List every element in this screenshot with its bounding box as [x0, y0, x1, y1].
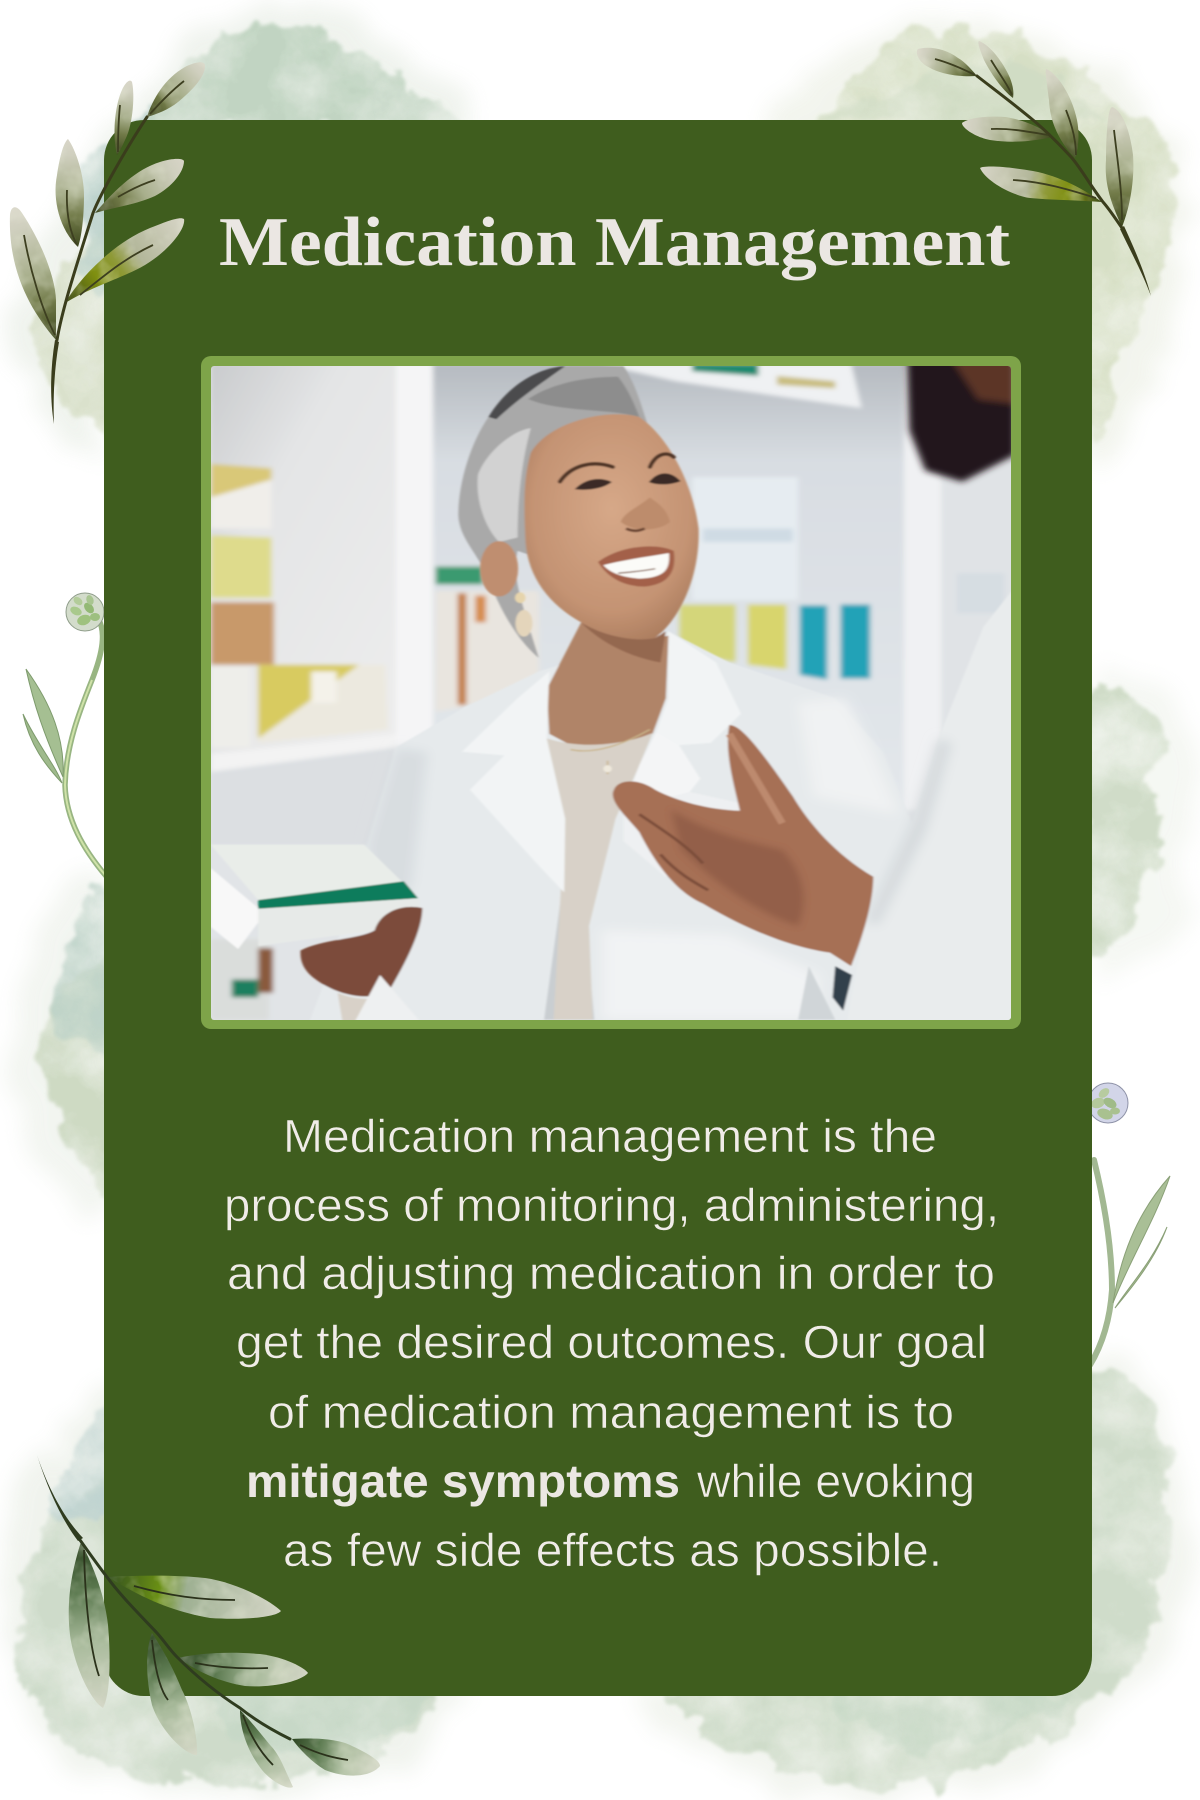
body text	[224, 1110, 999, 1576]
face	[524, 414, 699, 639]
pharmacist lab coat	[322, 632, 874, 1012]
body text: mitigate symptoms	[246, 1455, 680, 1507]
holding hand	[300, 907, 422, 996]
collar lapels	[462, 671, 565, 892]
branch: top right leaves	[917, 41, 1151, 296]
body text: and adjusting medication in order to	[227, 1247, 995, 1299]
nose	[621, 497, 670, 529]
medicine box	[211, 845, 404, 900]
ear	[480, 541, 518, 596]
body text: of medication management is to	[268, 1386, 954, 1438]
watercolour wash: top right	[770, 11, 1190, 480]
body text: get the desired outcomes. Our goal	[236, 1316, 987, 1368]
smile	[598, 546, 674, 587]
title: Medication Management	[219, 204, 1010, 281]
watercolour wash: left middle	[10, 870, 115, 1220]
gesturing hand	[613, 725, 873, 966]
body text: process of monitoring, administering,	[224, 1179, 999, 1231]
photo: pharmacist smiling	[200, 350, 1030, 1050]
neck and chest	[547, 622, 668, 747]
watercolour wash: top left	[10, 5, 480, 470]
earring	[515, 592, 526, 603]
branch: bottom left leaves	[37, 1455, 380, 1788]
body text: while evoking	[696, 1455, 975, 1507]
photo frame	[201, 356, 1021, 1029]
photo background shelves	[200, 350, 1030, 1050]
watercolour wash: bottom right	[630, 1350, 1192, 1799]
watercolour wash: right middle	[1080, 660, 1195, 990]
hair	[458, 366, 668, 658]
right person's beard	[907, 359, 1015, 482]
flower: left stem	[23, 593, 106, 876]
flower: right stem	[1088, 1083, 1170, 1365]
watercolour wash: bottom left	[5, 1370, 460, 1793]
branch: top left leaves	[10, 62, 205, 424]
sweater	[547, 733, 653, 1020]
body text: as few side effects as possible.	[283, 1524, 942, 1576]
brows and eyes	[560, 454, 674, 482]
main panel	[104, 120, 1092, 1696]
pharmacist figure	[211, 366, 1015, 1024]
body text: Medication management is the	[283, 1110, 937, 1162]
right person's coat	[860, 594, 1011, 1020]
